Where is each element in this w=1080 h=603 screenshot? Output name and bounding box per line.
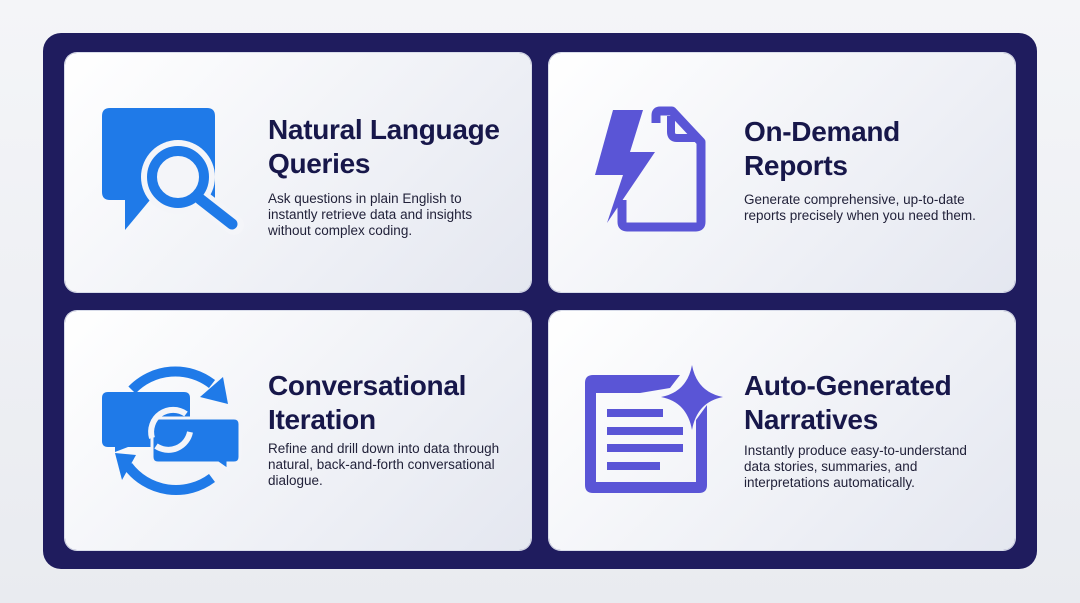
heading: Narratives — [744, 404, 878, 435]
text: Ask questions in plain English to instantly retrieve data and insights without complex coding. — [268, 191, 472, 238]
panel: natural language queries — [65, 53, 531, 292]
heading — [268, 370, 466, 435]
heading: Reports — [744, 150, 848, 181]
panel: auto-generated narratives — [549, 311, 1015, 550]
heading — [744, 370, 951, 435]
heading: Natural Language — [268, 114, 500, 145]
text: Generate comprehensive, up-to-date reports precisely when you need them. — [744, 192, 976, 223]
heading: Iteration — [268, 404, 376, 435]
heading: Queries — [268, 148, 370, 179]
heading — [268, 114, 500, 179]
text: Refine and drill down into data through natural, back-and-forth conversational dialogue. — [268, 441, 499, 488]
icon: conversation cycle — [102, 366, 238, 495]
heading: Auto-Generated — [744, 370, 951, 401]
icon: document sparkle — [585, 365, 723, 493]
heading: Conversational — [268, 370, 466, 401]
heading: On-Demand — [744, 116, 900, 147]
panel: on-demand reports — [549, 53, 1015, 292]
text: Instantly produce easy-to-understand data stories, summaries, and interpretations automatically. — [744, 443, 967, 490]
icon: bolt document — [595, 106, 706, 232]
icon: chat magnifier — [102, 108, 238, 230]
panel: conversational iteration — [65, 311, 531, 550]
heading — [744, 116, 900, 181]
